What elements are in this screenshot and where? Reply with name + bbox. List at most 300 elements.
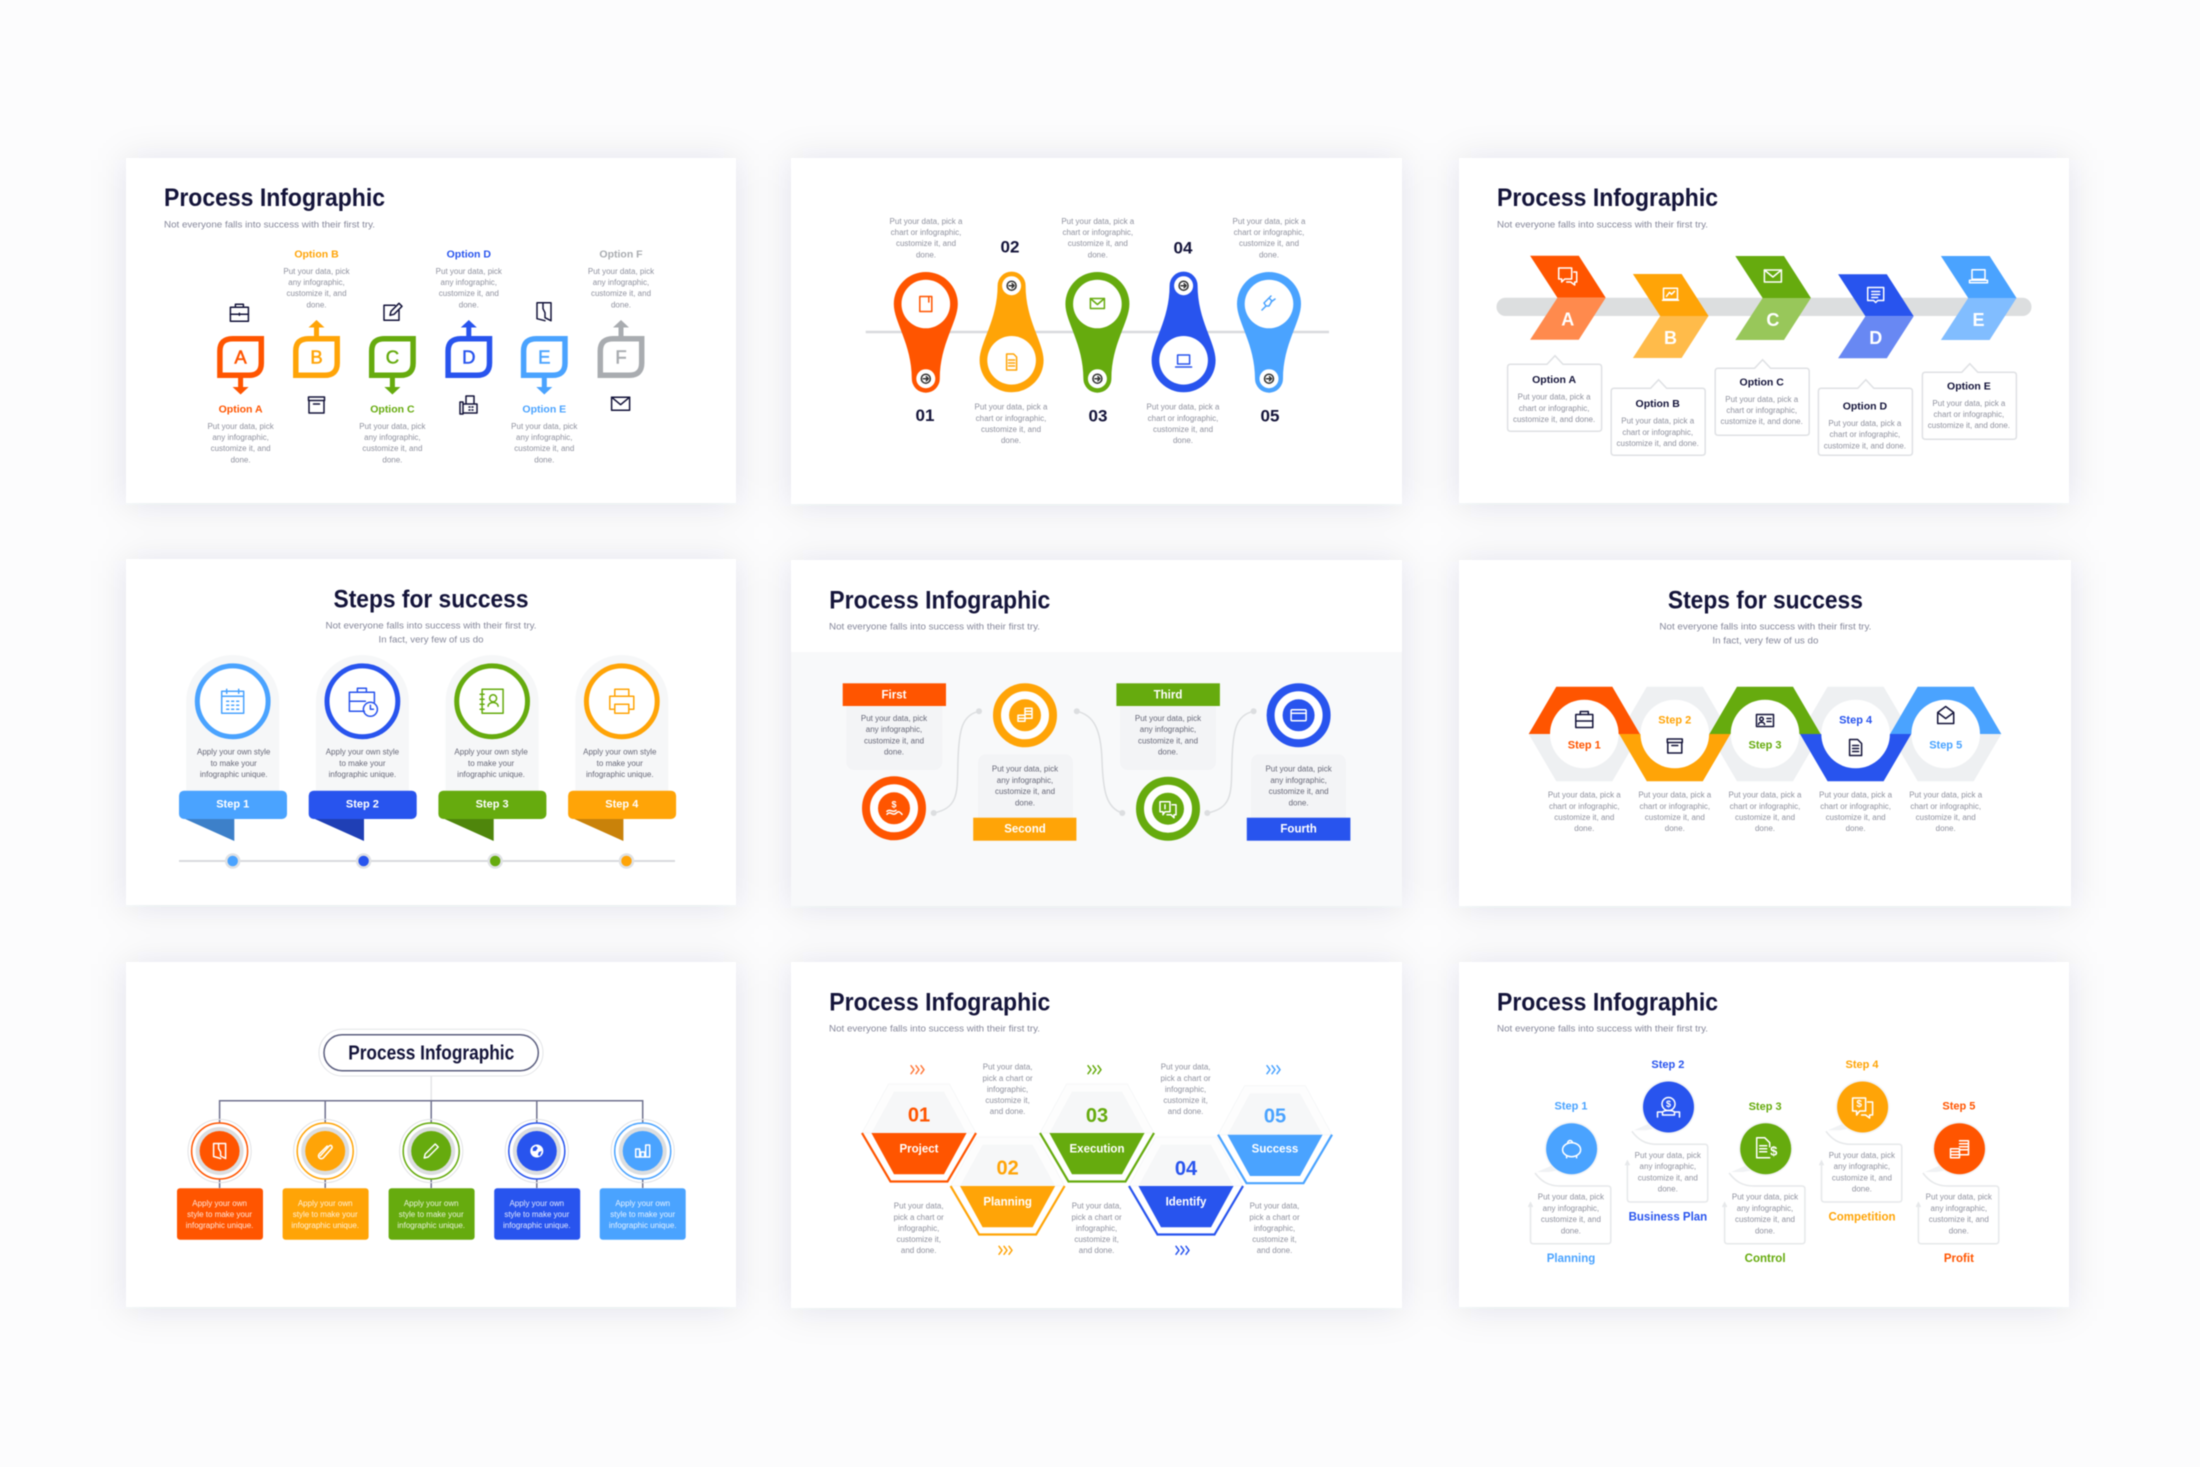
timeline dots — [226, 854, 633, 868]
node 1: infographic unique. — [186, 1221, 253, 1230]
pin 01: Put your data, pick a — [890, 217, 963, 226]
text: hexagon notes: infographic, — [1165, 1085, 1206, 1094]
title: Process Infographic — [164, 184, 385, 212]
subtitle — [326, 621, 536, 645]
option B: done. — [306, 300, 327, 309]
subtitle: Not everyone falls into success with their first try. — [1497, 220, 1708, 230]
step 3 card: infographic unique. — [457, 770, 525, 779]
icon: chat dollar: $ — [1856, 1099, 1862, 1110]
panel: option arrows — [126, 158, 736, 503]
step: fourth — [1247, 687, 1350, 841]
step 2 business plan: Put your data, pick — [1635, 1151, 1702, 1160]
subtitle: Not everyone falls into success with their first try. — [164, 220, 375, 230]
icon: chart board — [1662, 288, 1678, 300]
title: Process Infographic — [1497, 988, 1718, 1016]
option F: Option F — [599, 249, 643, 261]
step 2 card: Apply your own style — [326, 748, 400, 757]
icon: document — [1007, 354, 1017, 370]
step 3 card: Apply your own style — [454, 748, 528, 757]
node 1: style to make your — [187, 1210, 252, 1219]
text: hexagon notes: customize it, — [1252, 1235, 1297, 1244]
hexagon 02: Planning — [983, 1197, 1032, 1209]
panel: stepped bubbles — [1459, 962, 2069, 1307]
subtitle: Not everyone falls into success with their first try. — [829, 1024, 1040, 1035]
hexagon 04: Identify — [1166, 1197, 1207, 1209]
text: hexagon notes: customize it, — [985, 1096, 1030, 1105]
text: hexagon notes: Put your data, — [1161, 1063, 1211, 1072]
step: second: done. — [1015, 798, 1035, 807]
hexagon 02 — [951, 1137, 1065, 1234]
pin 03: chart or infographic, — [1062, 228, 1133, 237]
icon: bar chart — [636, 1145, 650, 1157]
title: Process Infographic — [829, 988, 1050, 1016]
callout: option D: chart or infographic, — [1830, 430, 1900, 439]
option C: Put your data, pick — [359, 422, 427, 431]
pin 04: Put your data, pick a — [1147, 403, 1220, 412]
chevron C — [1735, 256, 1811, 340]
pin 02: customize it, and — [981, 425, 1041, 434]
step: second: Second — [1004, 824, 1046, 836]
pin 04: 04 — [1174, 238, 1193, 258]
step: first: done. — [884, 748, 904, 757]
step 2: customize it, and — [1645, 813, 1705, 822]
option D: any infographic, — [441, 278, 497, 287]
pin 01 — [890, 217, 963, 425]
step: second: any infographic, — [997, 776, 1053, 785]
step 5: chart or infographic, — [1910, 802, 1981, 811]
step 4 card: Apply your own style — [583, 748, 657, 757]
panel: hexagon steps — [791, 962, 1402, 1308]
icon: window — [1291, 710, 1306, 721]
callout: option E: chart or infographic, — [1934, 410, 2004, 419]
step 1 card: to make your — [211, 759, 257, 768]
title: Steps for success — [1668, 586, 1863, 614]
icon: calendar — [222, 689, 244, 713]
callout: option B: Option B — [1636, 398, 1680, 410]
hexagon 01: Project — [900, 1144, 939, 1156]
title pill: Process Infographic — [348, 1042, 514, 1064]
icon: id card — [1756, 714, 1774, 726]
option C: any infographic, — [364, 433, 421, 442]
callout: option C: chart or infographic, — [1726, 406, 1797, 415]
panel: hexagon wave — [1459, 560, 2071, 906]
node 5: style to make your — [610, 1210, 675, 1219]
step 4 competition — [1820, 1059, 1902, 1223]
option A: Put your data, pick — [207, 422, 275, 431]
option A: done. — [231, 455, 251, 464]
coloured wave — [1529, 687, 2001, 781]
step 4 card: to make your — [597, 759, 643, 768]
hexagon 02: 02 — [996, 1157, 1019, 1179]
step 1: Step 1 — [1568, 739, 1601, 751]
icon: globe — [530, 1144, 543, 1158]
option B: any infographic, — [288, 278, 345, 287]
option D: Put your data, pick — [436, 267, 503, 276]
step 2 business plan — [1625, 1059, 1708, 1223]
step: first — [843, 683, 946, 836]
track — [1496, 298, 2032, 316]
pin 05 — [1233, 217, 1306, 426]
text: hexagon notes: Put your data, — [894, 1202, 944, 1211]
icon: briefcase clock — [349, 688, 377, 716]
panel: steps banners — [126, 559, 736, 905]
step: second — [973, 687, 1076, 841]
step 2 card — [309, 655, 417, 841]
arrows: orange chevrons — [911, 1066, 924, 1074]
pin 03 — [1061, 217, 1135, 426]
chevron E: E — [1972, 310, 1985, 330]
step 2 card: infographic unique. — [329, 770, 396, 779]
node 2: Apply your own — [298, 1199, 353, 1208]
grey hexagons — [1529, 687, 2001, 781]
step 4 card — [568, 655, 676, 841]
title pill — [319, 1029, 543, 1076]
text: hexagon notes: and done. — [990, 1107, 1025, 1116]
pin 02: done. — [1001, 436, 1021, 445]
step 5: Step 5 — [1929, 739, 1962, 751]
text: hexagon notes: customize it, — [1163, 1096, 1208, 1105]
step 1 card: Apply your own style — [197, 748, 271, 757]
step 3 card — [438, 655, 546, 841]
step: third: Put your data, pick — [1135, 714, 1202, 723]
step: second: Put your data, pick — [992, 765, 1059, 774]
icon: pencil — [424, 1144, 438, 1158]
icon: briefcase — [1576, 712, 1593, 728]
option D: Option D — [447, 249, 491, 261]
pin 03: 03 — [1089, 406, 1107, 426]
icon: coin hand: $ — [1666, 1099, 1671, 1109]
node 3: Apply your own — [404, 1199, 459, 1208]
callout: option C: Option C — [1740, 376, 1784, 388]
step 4: done. — [1846, 824, 1866, 833]
chevron B: B — [1664, 328, 1677, 348]
step 4 competition: Competition — [1828, 1211, 1896, 1223]
option E: E — [538, 346, 550, 368]
step 1 planning: customize it, and — [1541, 1215, 1601, 1224]
step 3 control: Control — [1745, 1253, 1786, 1265]
step 1 planning: Put your data, pick — [1538, 1193, 1605, 1202]
step 1 card: Step 1 — [216, 798, 249, 810]
chevron D — [1838, 274, 1914, 358]
text: hexagon notes — [894, 1063, 1300, 1255]
option E: any infographic, — [516, 433, 573, 442]
option F: any infographic, — [593, 278, 649, 287]
arrows: amber chevrons — [999, 1246, 1012, 1254]
text: hexagon notes: customize it, — [1074, 1235, 1119, 1244]
option B: B — [310, 346, 323, 368]
timeline — [179, 860, 675, 862]
text: hexagon notes: pick a chart or — [1249, 1213, 1300, 1222]
icon: chat — [1559, 268, 1577, 285]
icon: coins — [1018, 708, 1032, 721]
step 1 planning: Step 1 — [1554, 1101, 1588, 1113]
pin 04: customize it, and — [1153, 425, 1213, 434]
icon: laptop — [1176, 355, 1192, 367]
step 5 profit: Put your data, pick — [1926, 1193, 1993, 1202]
callout: option E: customize it, and done. — [1928, 421, 2010, 430]
node 3 — [389, 1119, 475, 1240]
icon: envelope — [1764, 270, 1781, 282]
option E: Option E — [522, 404, 566, 416]
title: Process Infographic — [1497, 184, 1718, 212]
step 3 control: any infographic, — [1737, 1204, 1793, 1213]
subtitle: In fact, very few of us do — [1712, 635, 1818, 646]
icon: contact book — [480, 689, 503, 713]
text: hexagon notes: and done. — [1168, 1107, 1203, 1116]
callout: option E: Option E — [1947, 380, 1991, 392]
icon: printer — [610, 689, 634, 713]
step 4 card: infographic unique. — [586, 770, 654, 779]
step 4 competition: Step 4 — [1845, 1059, 1879, 1071]
node 3: infographic unique. — [397, 1221, 465, 1230]
step: third — [1116, 683, 1220, 837]
step 1 planning: done. — [1561, 1226, 1581, 1235]
icon: invoice dollar — [1757, 1138, 1778, 1159]
callout: option C — [1715, 360, 1809, 435]
text: hexagon notes: pick a chart or — [982, 1074, 1033, 1083]
step 1 planning: any infographic, — [1543, 1204, 1599, 1213]
chevron E — [1941, 256, 2016, 340]
option D — [436, 249, 503, 414]
step: first: any infographic, — [866, 725, 922, 734]
step 5 profit: Profit — [1944, 1253, 1974, 1265]
option C: Option C — [370, 404, 415, 416]
node 2 — [283, 1119, 369, 1240]
text: hexagon notes: and done. — [1257, 1246, 1292, 1255]
step 4: chart or infographic, — [1820, 802, 1891, 811]
callout: option C: customize it, and done. — [1721, 417, 1803, 426]
pin 01: chart or infographic, — [891, 228, 961, 237]
option D: D — [462, 346, 475, 368]
arrows: green chevrons — [1088, 1066, 1101, 1074]
chevron C: C — [1766, 310, 1779, 330]
icon: hand dollar: $ — [891, 799, 897, 809]
step 1 card — [179, 655, 287, 841]
step 4: customize it, and — [1826, 813, 1886, 822]
step 4 competition: customize it, and — [1832, 1173, 1892, 1182]
step 1 — [1548, 700, 1621, 833]
node 4: style to make your — [504, 1210, 570, 1219]
step 5 profit: Step 5 — [1942, 1101, 1975, 1113]
step: third: done. — [1158, 748, 1178, 757]
node 1: Apply your own — [192, 1199, 247, 1208]
icon: hand dollar — [887, 799, 902, 814]
step 2 business plan: Business Plan — [1629, 1211, 1707, 1223]
option A: customize it, and — [211, 444, 271, 453]
step 4 — [1819, 700, 1893, 833]
arrows: blue chevrons — [1176, 1246, 1189, 1254]
step 3 card: to make your — [468, 759, 515, 768]
icon: briefcase — [230, 304, 248, 321]
step: fourth: done. — [1289, 798, 1309, 807]
step 5: Put your data, pick a — [1909, 791, 1983, 800]
step 5 — [1909, 700, 1983, 833]
hexagon 01: 01 — [908, 1104, 930, 1126]
step 3 control: customize it, and — [1735, 1215, 1795, 1224]
option D: customize it, and — [439, 289, 499, 298]
text: hexagon notes: pick a chart or — [1071, 1213, 1122, 1222]
panel: winding process — [791, 560, 1402, 906]
subtitle: In fact, very few of us do — [378, 634, 484, 645]
step 2: done. — [1665, 824, 1685, 833]
step 4 competition: any infographic, — [1834, 1162, 1890, 1171]
callout: option D — [1818, 380, 1912, 455]
step 3 control — [1723, 1101, 1805, 1265]
icon: fax — [460, 396, 477, 414]
step 2: chart or infographic, — [1639, 802, 1710, 811]
hexagon 05 — [1218, 1086, 1332, 1183]
text: hexagon notes: and done. — [1079, 1246, 1114, 1255]
pin 02: 02 — [1001, 238, 1019, 257]
subtitle — [1659, 622, 1871, 646]
callout: option A: chart or infographic, — [1519, 404, 1589, 413]
step 2: Put your data, pick a — [1638, 791, 1712, 800]
icon: coin stack — [1950, 1141, 1968, 1158]
connectors — [931, 708, 1257, 816]
step 4 card: Step 4 — [605, 798, 639, 810]
step: third: customize it, and — [1138, 736, 1198, 745]
step 4: Put your data, pick a — [1819, 791, 1893, 800]
chevron A — [1530, 256, 1606, 340]
callout: option D: Option D — [1843, 400, 1887, 412]
callout: option E: Put your data, pick a — [1932, 399, 2006, 408]
pin 05: customize it, and — [1239, 239, 1299, 248]
step: fourth: Put your data, pick — [1265, 765, 1333, 774]
subtitle: Not everyone falls into success with their first try. — [1497, 1024, 1708, 1035]
icon: pencil note — [384, 303, 402, 320]
icon: archive box — [1667, 739, 1682, 753]
step 1: Put your data, pick a — [1548, 791, 1621, 800]
option A: any infographic, — [212, 433, 269, 442]
icon: document — [1850, 740, 1862, 756]
step 1: done. — [1574, 824, 1594, 833]
step 2 business plan: customize it, and — [1638, 1173, 1698, 1182]
panel: pin timeline — [791, 158, 1402, 504]
step 2 business plan: Step 2 — [1651, 1059, 1684, 1071]
icon: chat dollar — [1160, 802, 1176, 818]
icon: folded map — [214, 1144, 226, 1158]
hexagon 03: 03 — [1086, 1105, 1108, 1127]
step 1: customize it, and — [1554, 813, 1614, 822]
icon: envelope — [1090, 298, 1104, 308]
callout: option D: Put your data, pick a — [1828, 419, 1902, 428]
text: hexagon notes: infographic, — [1076, 1224, 1117, 1233]
pin 03: done. — [1088, 250, 1108, 259]
pin 04: done. — [1173, 436, 1193, 445]
step: third: any infographic, — [1140, 725, 1196, 734]
hexagon 04 — [1129, 1137, 1243, 1234]
icon: open envelope — [1938, 706, 1954, 724]
option B: customize it, and — [286, 289, 347, 298]
node 4: infographic unique. — [503, 1221, 571, 1230]
text: hexagon notes: and done. — [901, 1246, 936, 1255]
icon: message — [1868, 288, 1884, 302]
step 3 card: Step 3 — [476, 798, 509, 810]
pin 05: 05 — [1261, 406, 1279, 426]
step: first: customize it, and — [864, 736, 924, 745]
pin 02 — [975, 238, 1048, 445]
step: fourth: Fourth — [1280, 824, 1317, 836]
option F: customize it, and — [591, 289, 651, 298]
option F: F — [615, 346, 627, 368]
node 5: Apply your own — [615, 1199, 670, 1208]
step 2 card: to make your — [339, 759, 386, 768]
node 4 — [494, 1119, 580, 1240]
option B — [283, 249, 351, 413]
subtitle: Not everyone falls into success with their first try. — [326, 621, 536, 632]
pin 03: Put your data, pick a — [1061, 217, 1135, 226]
icon: coin hand — [1658, 1098, 1680, 1117]
node 3: style to make your — [399, 1210, 464, 1219]
step 3 control: Put your data, pick — [1732, 1193, 1799, 1202]
step: second: customize it, and — [995, 787, 1055, 796]
callout: option B — [1611, 380, 1705, 455]
step 3: customize it, and — [1735, 813, 1795, 822]
step 3: Put your data, pick a — [1729, 791, 1802, 800]
chevron B — [1633, 274, 1708, 358]
callout: option A: customize it, and done. — [1513, 415, 1595, 424]
chevron A: A — [1561, 310, 1574, 330]
icon: laptop — [1970, 270, 1988, 283]
option E: customize it, and — [514, 444, 574, 453]
text: hexagon notes: pick a chart or — [894, 1213, 944, 1222]
icon: invoice dollar: $ — [1770, 1144, 1778, 1159]
title: Process Infographic — [829, 586, 1050, 614]
text: hexagon notes: Put your data, — [1250, 1202, 1299, 1211]
step 2 — [1638, 700, 1712, 833]
step 1 card: infographic unique. — [200, 770, 268, 779]
pin 05: done. — [1259, 250, 1279, 259]
chevron D: D — [1869, 328, 1882, 348]
option C: done. — [382, 455, 402, 464]
option A: Option A — [219, 404, 263, 416]
icon: plug — [1262, 296, 1275, 310]
option C — [359, 303, 427, 464]
title: Steps for success — [334, 585, 528, 613]
option F: done. — [611, 300, 631, 309]
option B: Put your data, pick — [283, 267, 351, 276]
step 2 business plan: done. — [1658, 1185, 1678, 1194]
subtitle: Not everyone falls into success with their first try. — [1659, 622, 1871, 633]
option A — [207, 304, 275, 464]
node 5 — [600, 1119, 686, 1240]
arrows: light blue chevrons — [1267, 1066, 1280, 1074]
callout: option B: Put your data, pick a — [1621, 417, 1695, 426]
step: third: Third — [1154, 689, 1182, 701]
text: hexagon notes: customize it, — [896, 1235, 941, 1244]
option F — [588, 249, 655, 410]
callout: option A: Put your data, pick a — [1518, 393, 1591, 402]
panel: hierarchy tree — [126, 962, 736, 1307]
node 2: style to make your — [293, 1210, 358, 1219]
callout: option C: Put your data, pick a — [1725, 395, 1799, 404]
icon: paperclip — [319, 1145, 332, 1159]
node 5: infographic unique. — [609, 1221, 677, 1230]
step 4 competition: Put your data, pick — [1829, 1151, 1896, 1160]
text: hexagon notes: Put your data, — [983, 1063, 1033, 1072]
pin 01: 01 — [916, 406, 934, 425]
subtitle: Not everyone falls into success with their first try. — [829, 622, 1040, 633]
hexagon 03 — [1040, 1084, 1154, 1182]
option C: C — [386, 346, 399, 368]
option E: done. — [534, 455, 554, 464]
step 3 control: Step 3 — [1749, 1101, 1782, 1113]
step 5 profit: done. — [1949, 1226, 1969, 1235]
icon: archive box — [308, 397, 324, 413]
option B: Option B — [294, 249, 339, 261]
icon: notebook — [920, 296, 932, 312]
node 1 — [177, 1119, 263, 1240]
